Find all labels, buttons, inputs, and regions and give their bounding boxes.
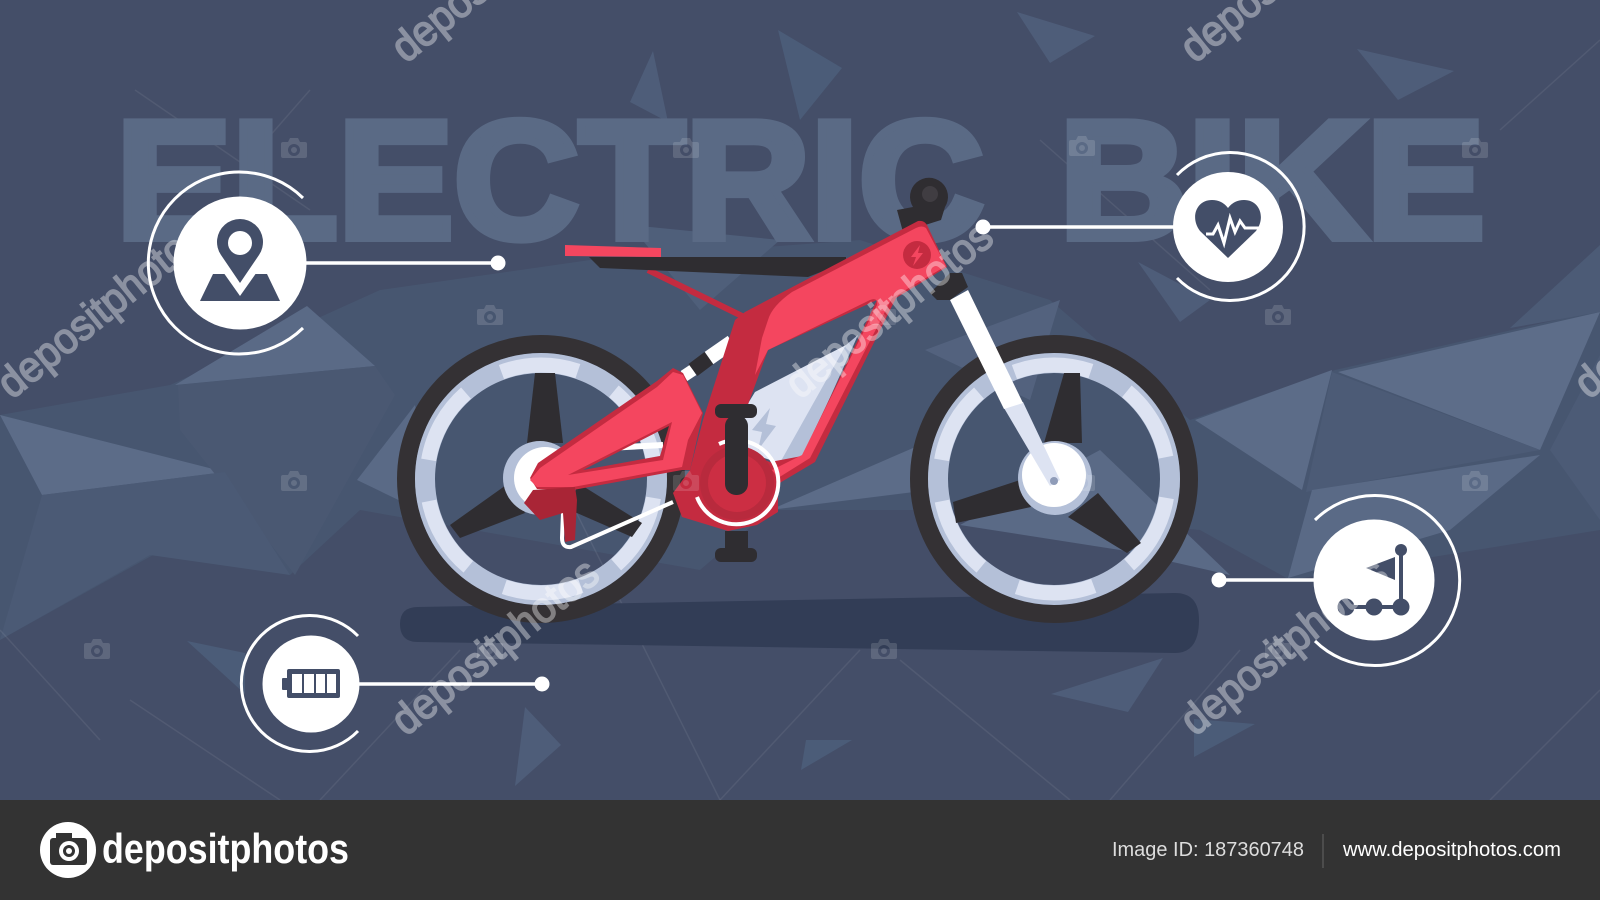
website url: www.depositphotos.com [1342, 839, 1561, 861]
watermark text: depositphotos [776, 212, 1002, 408]
icon: route with flag [1338, 544, 1410, 616]
callout: battery [241, 616, 550, 752]
watermark text: depositphotos [382, 549, 608, 745]
watermark camera icons [84, 136, 1488, 659]
icon: battery level [282, 669, 340, 698]
bottom bracket [697, 440, 778, 524]
swingarm [524, 368, 703, 542]
callout: location [148, 172, 506, 354]
chain [562, 445, 673, 547]
battery [726, 335, 858, 470]
icon: depositphotos logo [40, 822, 96, 878]
title [116, 86, 1485, 274]
callout: heart rate [976, 152, 1304, 300]
callout: route flag [1212, 496, 1460, 666]
frame [673, 221, 947, 531]
title: ELECTRIC [116, 86, 984, 274]
ground shadow [400, 593, 1199, 653]
watermark text: depositphotos [1171, 549, 1397, 745]
footer brand name: depositphotos [102, 825, 349, 872]
icon: heart pulse [1195, 200, 1261, 258]
front fork [930, 273, 1060, 486]
rear shock [684, 342, 732, 376]
image id: Image ID: 187360748 [1112, 839, 1304, 861]
icon: battery bolt [752, 408, 776, 450]
seat stay [648, 270, 744, 317]
footer bar [0, 800, 1600, 900]
title: BIKE [1059, 86, 1485, 274]
icon: map with pin [200, 219, 280, 301]
rear wheel [406, 344, 676, 614]
rack [589, 257, 846, 277]
front wheel [919, 344, 1189, 614]
handlebar [897, 178, 948, 232]
crank and pedals [715, 404, 757, 562]
icon: frame lightning badge [903, 241, 931, 269]
saddle [565, 245, 661, 257]
